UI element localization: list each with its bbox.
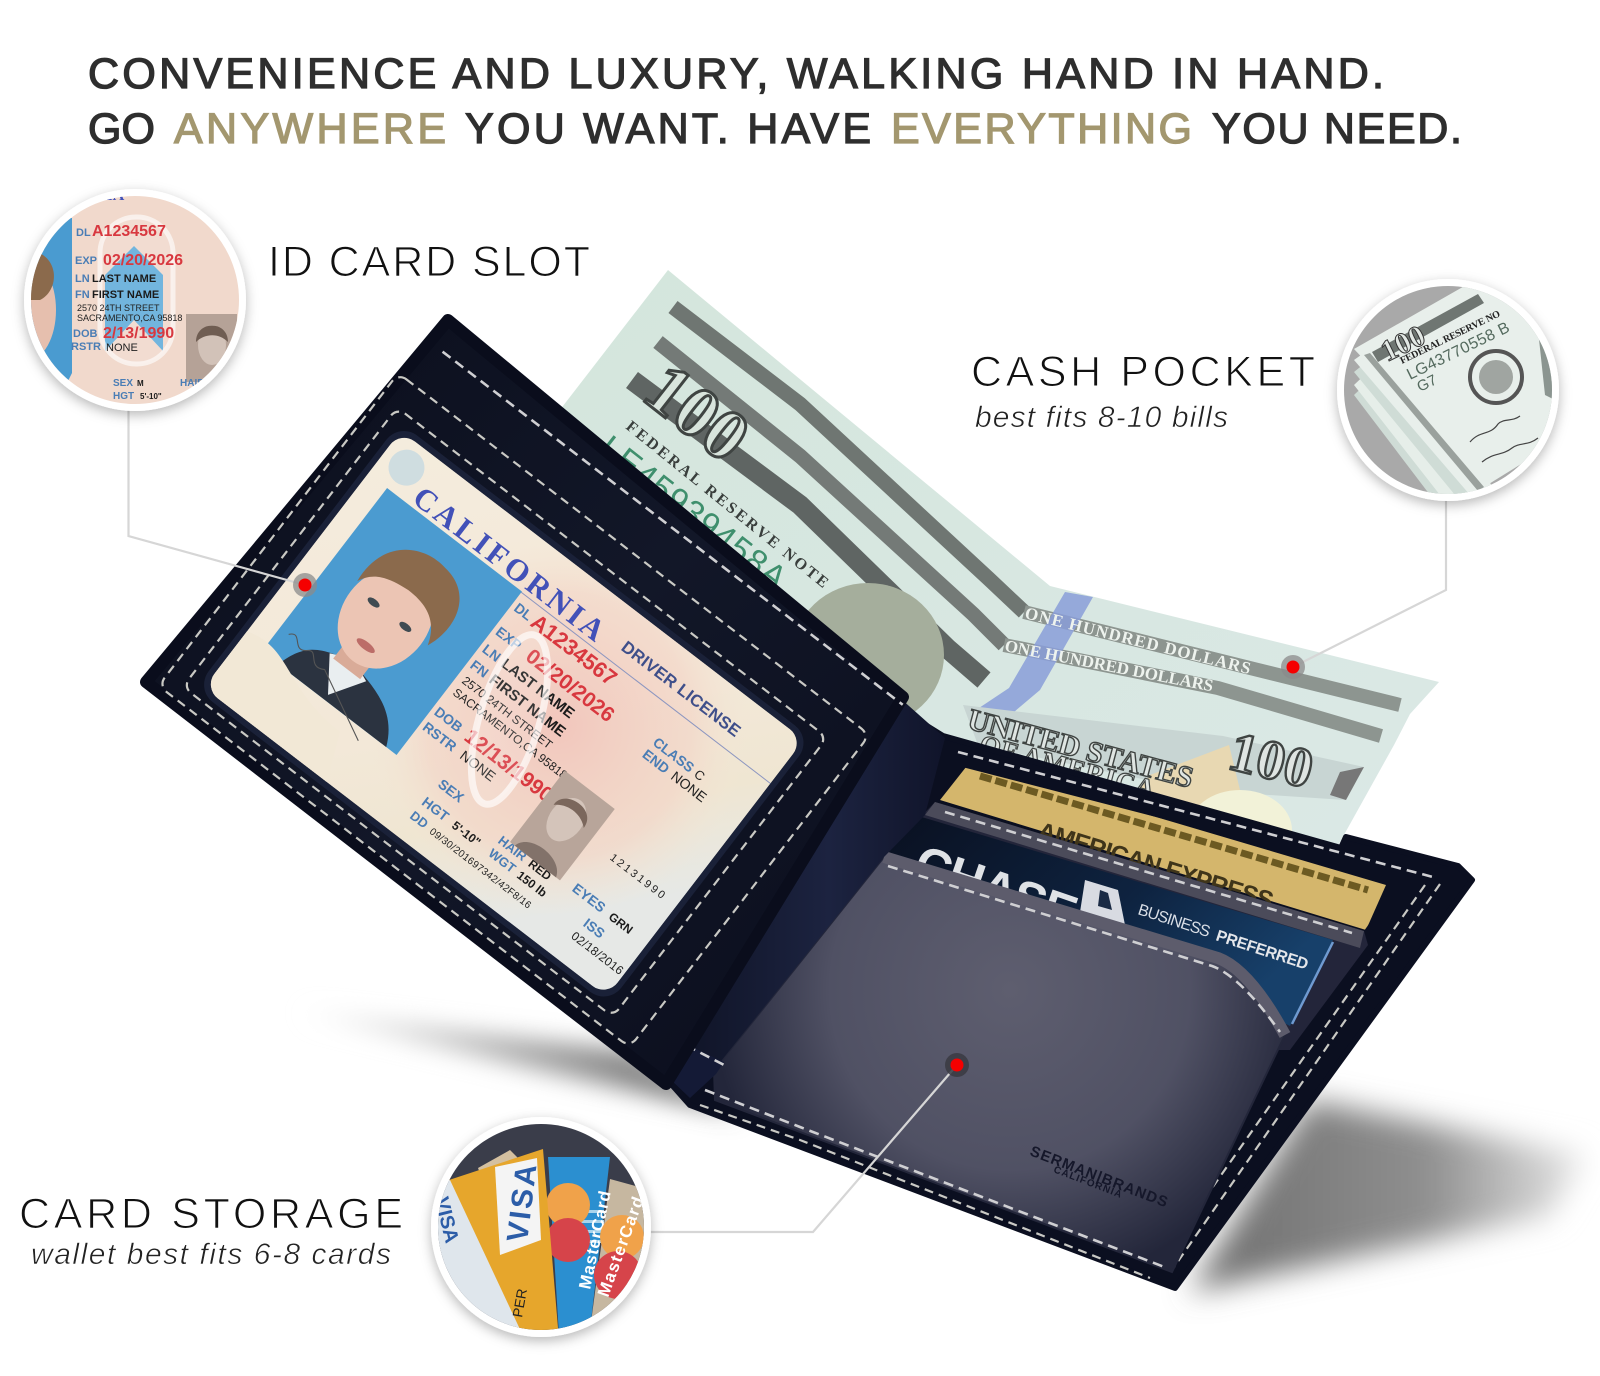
blue security strip [973, 592, 1093, 712]
yellow visa card [449, 1149, 559, 1340]
bubble: cards: MasterCard [575, 1189, 615, 1291]
white visa card [438, 1180, 520, 1328]
bubble: id card: FIRST NAME [92, 289, 159, 301]
front pocket highlight edge [884, 857, 1285, 1035]
flap stitch [672, 1038, 726, 1066]
one hundred dollars top: ONE HUNDRED DOLLARS [1023, 603, 1253, 678]
small 100 numeral: 100 [1223, 720, 1319, 801]
chase card: PREFERRED [1214, 928, 1310, 973]
title: ANYWHERE [174, 105, 446, 153]
bubble: cash [1337, 279, 1560, 501]
one hundred dollars middle: ONE HUNDRED DOLLARS [1003, 636, 1215, 695]
bubble: id card: FN [75, 289, 90, 301]
label: card storage [19, 1190, 403, 1271]
id details: 12/13/1990 [460, 725, 557, 807]
wallet right panel [650, 700, 1472, 1288]
bubble: cards: VISA [501, 1162, 543, 1244]
bill band top [673, 307, 1024, 612]
bubble: cash: G7 [1414, 372, 1440, 396]
bubble chevron [105, 246, 163, 351]
id details: END [640, 746, 673, 777]
wallet shadow left [300, 1012, 740, 1115]
bubble: id card [0, 187, 246, 411]
visa label [495, 1158, 541, 1255]
inner stitch ring [183, 408, 827, 1017]
bill band lower [632, 380, 984, 680]
id details: 02/20/2026 [521, 645, 619, 727]
note: card capacity: wallet best fits 6-8 cards [31, 1238, 391, 1271]
id details: RED [526, 857, 554, 883]
portrait photo [262, 488, 522, 755]
bottom stitch [705, 1090, 1167, 1268]
id details: 12131990 [607, 852, 667, 901]
bubble: cards: MasterCard [594, 1194, 648, 1299]
title: GO [88, 105, 155, 153]
right edge stitch [1172, 884, 1440, 1270]
bubble: cards: VISA [430, 1195, 463, 1245]
id details: 150 lb [514, 868, 550, 900]
id card [204, 431, 804, 997]
bubble: id card: 2/13/1990 [103, 325, 174, 342]
id details: RSTR [420, 719, 460, 754]
wallet fold [650, 698, 945, 1098]
title [88, 50, 1462, 153]
bubble: id card: RSTR [71, 341, 101, 353]
oval tint [1100, 745, 1240, 840]
bubble: id card: LAST NAME [92, 273, 156, 285]
hologram oval [468, 631, 552, 808]
id details: CLASS [650, 734, 697, 775]
chase card [884, 815, 1333, 1026]
brand emboss: SERMAN|BRANDS [1028, 1143, 1170, 1211]
wallet left panel [146, 320, 903, 1084]
serial number: LE45939458A [592, 428, 794, 598]
id details: SEX [435, 776, 468, 806]
bubble: id card: HAIR [180, 378, 205, 389]
label: id card slot: ID CARD SLOT [268, 238, 590, 286]
callout line: cards [650, 1065, 957, 1232]
bubble: id card: NONE [106, 342, 138, 354]
id details: SACRAMENTO,CA 95818 [450, 685, 570, 782]
id details [410, 602, 708, 974]
label: cash pocket: CASH POCKET [971, 348, 1315, 396]
small portrait [510, 771, 615, 880]
bubble: id card: EXP [75, 255, 97, 267]
id details: 02/18/2016 [569, 929, 626, 978]
portrait [792, 583, 944, 727]
front leather pocket [714, 857, 1285, 1272]
corner grey mark [1330, 767, 1364, 800]
title: CONVENIENCE AND LUXURY, WALKING HAND IN HAND. [88, 50, 1384, 98]
middle stitch ring [158, 373, 870, 1047]
id details: DL [511, 600, 536, 624]
driver license: DRIVER LICENSE [618, 637, 744, 741]
id details: DD [407, 808, 431, 831]
bubble: cash: 100 [1376, 319, 1431, 368]
bubble: cash: LG43770558 B [1404, 319, 1512, 384]
marker: cash [1281, 655, 1305, 679]
bubble: id card: SACRAMENTO,CA 95818 [77, 313, 182, 323]
marker: id card [293, 573, 317, 597]
bubble: id card: LN [75, 273, 90, 285]
bubble: cards: PER [509, 1287, 530, 1319]
of america: OF AMERICA [976, 729, 1159, 805]
stitched rings and id card [158, 338, 903, 1052]
state seal [388, 450, 424, 486]
bubble: cash: FEDERAL RESERVE NO [1398, 308, 1502, 367]
marker: cards [945, 1053, 969, 1077]
id details: ISS [580, 915, 608, 941]
bill band middle [658, 342, 1004, 645]
watermark [1188, 790, 1292, 870]
id details: 5'-10" [449, 818, 483, 849]
title: YOU NEED. [1212, 105, 1462, 153]
top stitch [443, 352, 903, 705]
id details: 2570 24TH STREET [459, 674, 556, 752]
callout line: cash [1293, 500, 1446, 667]
id details: NONE [457, 747, 499, 784]
beige card [592, 1179, 644, 1316]
bubble: id card: SEX [113, 378, 133, 389]
title: YOU WANT. HAVE [465, 105, 871, 153]
back card pocket [840, 802, 1368, 1050]
label: card storage: CARD STORAGE [19, 1190, 403, 1238]
bubble: id card: A1234567 [92, 223, 166, 240]
bubble: id card: NIA [95, 187, 125, 204]
gold card [940, 762, 1386, 930]
bubble: cards [430, 1116, 653, 1340]
brand emboss: CALIFORNIA [1052, 1165, 1123, 1201]
the united states: UNITED STATES [964, 703, 1197, 795]
front pocket stitch [888, 866, 1280, 1032]
back pocket edge [925, 802, 1364, 948]
id details: EXP [493, 623, 525, 653]
bubble: id card: 5'-10" [140, 392, 162, 401]
top edge stitch [958, 752, 1433, 877]
bubble: id card: 02/20/2026 [103, 252, 183, 269]
id details: NONE [668, 768, 710, 805]
california heading: CALIFORNIA [407, 479, 613, 648]
bubble: id card: DL [76, 227, 91, 239]
callout line: id card [128, 410, 305, 585]
lower bill banner [963, 705, 1364, 800]
bubble: id card: M [137, 379, 144, 388]
id details: EYES [569, 880, 609, 915]
gold card: AMERICAN EXPRESS [1034, 817, 1277, 915]
back tan card [478, 1150, 518, 1170]
id details: GRN [606, 910, 636, 937]
id details: LN [479, 641, 504, 665]
id details: 09/30/201697342/42F8/16 [427, 826, 533, 911]
wallet shadow right [1190, 1100, 1585, 1292]
back pocket stitch [945, 812, 1352, 933]
note: bill capacity: best fits 8-10 bills [975, 401, 1228, 434]
top bill [1354, 284, 1560, 487]
id details: C [691, 766, 708, 784]
chase card: BUSINESS [1136, 902, 1212, 941]
large 100 numeral: 100 [630, 348, 765, 477]
federal reserve note: FEDERAL RESERVE NOTE [622, 418, 831, 592]
label: cash pocket [971, 348, 1315, 434]
id details: LAST NAME [498, 655, 578, 722]
fold flap [650, 1030, 724, 1098]
bubble: id card: DOB [73, 328, 98, 340]
signature area [210, 632, 326, 782]
id details: DOB [431, 703, 466, 735]
stacked bill edges [1354, 391, 1439, 494]
bubble: id card: HGT [113, 391, 134, 402]
id details: HAIR [495, 833, 530, 864]
id details: FN [467, 657, 492, 681]
banknotes [556, 270, 1439, 900]
id details: FIRST NAME [486, 671, 569, 741]
bubble: id card: 2570 24TH STREET [77, 303, 160, 313]
chase card: CHASE [907, 834, 1084, 942]
right mastercard logo [600, 1215, 644, 1259]
id details: A1234567 [526, 609, 622, 691]
id details: WGT [486, 845, 519, 876]
blue mastercard [548, 1157, 610, 1335]
id details: HGT [419, 794, 453, 824]
title: EVERYTHING [891, 105, 1192, 153]
window frame [195, 422, 812, 1005]
